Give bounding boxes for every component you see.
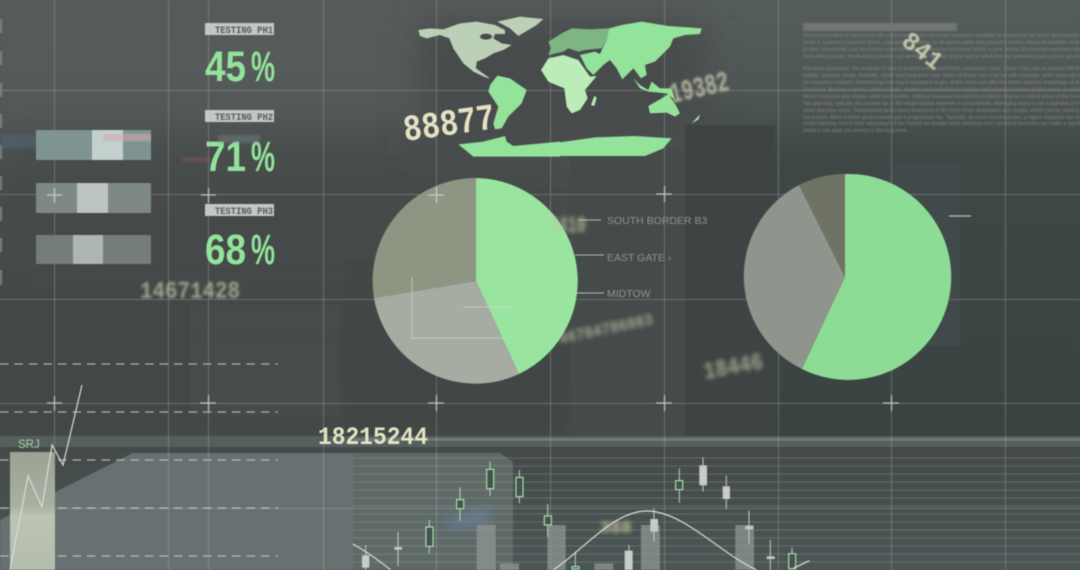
inner pointer lines <box>412 277 512 338</box>
testing phase 2: 71 <box>205 133 246 181</box>
left edge tick marks <box>0 19 2 285</box>
label: midtown: MIDTOW <box>607 288 651 300</box>
americas and west antarctica <box>418 17 560 157</box>
madagascar <box>591 96 597 106</box>
colored glitch streaks <box>0 134 260 162</box>
north america <box>418 22 512 78</box>
testing phase 1 <box>205 23 275 91</box>
crosshair markers <box>47 186 971 411</box>
floating number 19382: 19382 <box>667 66 732 112</box>
olive slice <box>373 178 476 298</box>
floating number 18215244: 18215244 <box>318 423 428 452</box>
filled candles <box>362 465 775 570</box>
blurred chart number: 388 <box>600 520 632 539</box>
label: east gate: EAST GATE › <box>607 252 672 264</box>
greenland <box>497 17 543 36</box>
SRJ label: SRJ <box>18 439 40 451</box>
panel: candlestick chart <box>353 457 1080 570</box>
gray slice <box>374 281 519 384</box>
world map <box>418 17 702 157</box>
panel: financial text block: tax burden. Most modern governments use a progressive tax. Typically, as one's income grows, a higher marginal rate of tax <box>803 115 1080 121</box>
panel: financial text block: which it can save you money in the long term. <box>803 128 908 134</box>
green slice <box>476 178 578 374</box>
green slice <box>802 174 951 380</box>
olive slice <box>799 174 845 277</box>
old world and east antarctica <box>535 22 702 156</box>
floating number 841: 841 <box>895 26 948 77</box>
text block title bar <box>803 23 957 31</box>
east antarctica <box>535 136 672 156</box>
floating number 2410: 2410 <box>549 213 586 239</box>
testing phase 1: TESTING PH1 <box>215 26 273 37</box>
floating number 88877: 88877 <box>401 98 498 153</box>
chart horizontal rules <box>353 458 1080 562</box>
bar <box>10 452 55 570</box>
testing phase 3 <box>205 204 275 274</box>
new zealand <box>692 114 700 123</box>
panel: left segmented bars <box>0 130 260 264</box>
candle wicks <box>366 457 792 570</box>
floating number long streak: 46784786883 <box>557 311 655 350</box>
panel: financial text block: Since insurance also enjoys some tax benefits, utilizing insurance investment products may be a critical piece of the overall <box>803 94 1080 100</box>
blue glow <box>445 505 490 530</box>
south america <box>488 76 527 129</box>
asia <box>580 22 702 79</box>
testing phase 2 <box>205 110 275 181</box>
panel: financial text block: an insurance contract. Determining how much insurance to get, at the most cost effective terms requires knowledge of the <box>803 80 1080 86</box>
segmented bar 1 <box>36 130 151 160</box>
line series <box>10 385 82 570</box>
panel: lower-left dashed chart <box>0 364 278 570</box>
floating number 14671428: 14671428 <box>140 279 240 306</box>
australia <box>648 94 680 117</box>
testing phase 1: 45 <box>205 43 246 91</box>
testing phase 1: % <box>251 43 275 91</box>
floating number 18446: 18446 <box>702 350 765 387</box>
testing phase 2: TESTING PH2 <box>215 113 273 124</box>
hollow green candles <box>426 469 796 569</box>
pie chart: left <box>373 178 578 384</box>
testing phase 3: 68 <box>205 226 246 274</box>
label: south border: SOUTH BORDER B3 <box>607 215 708 227</box>
sine curve <box>353 511 809 570</box>
gray slice <box>744 185 845 369</box>
segmented bar 3 <box>36 235 151 264</box>
testing phase 3: % <box>251 226 275 274</box>
panel: testing percentages <box>205 23 275 274</box>
panel: financial text block <box>803 23 1080 134</box>
africa <box>541 55 597 113</box>
pie chart: right <box>744 174 951 380</box>
panel: financial text block: worth is a person's balance sheet, calculated by adding up all assets under that person's control, minus all liabilities of the <box>803 40 1080 46</box>
gray volume bars <box>477 525 754 570</box>
dashed guide lines <box>0 364 278 556</box>
west antarctica <box>458 136 560 157</box>
indonesia <box>633 78 675 100</box>
europe <box>548 28 609 55</box>
testing phase 3: TESTING PH3 <box>215 207 273 218</box>
segmented bar 2 <box>36 183 151 213</box>
panel: financial text block: Adequate protection: the analysis of how to protect a household from unforeseen risks. These risks can be divided into the <box>803 66 1080 72</box>
testing phase 2: % <box>251 133 275 181</box>
panel: financial text block: In time. Household cash flow totals count the expected sources of income within a year, minus all expected expenses within <box>803 47 1080 53</box>
hudson bay <box>480 34 492 40</box>
panel: financial text block: Financial position is concerned with understanding the personal resources available by examining net worth and household <box>803 33 1080 39</box>
pie chart labels <box>575 215 708 300</box>
